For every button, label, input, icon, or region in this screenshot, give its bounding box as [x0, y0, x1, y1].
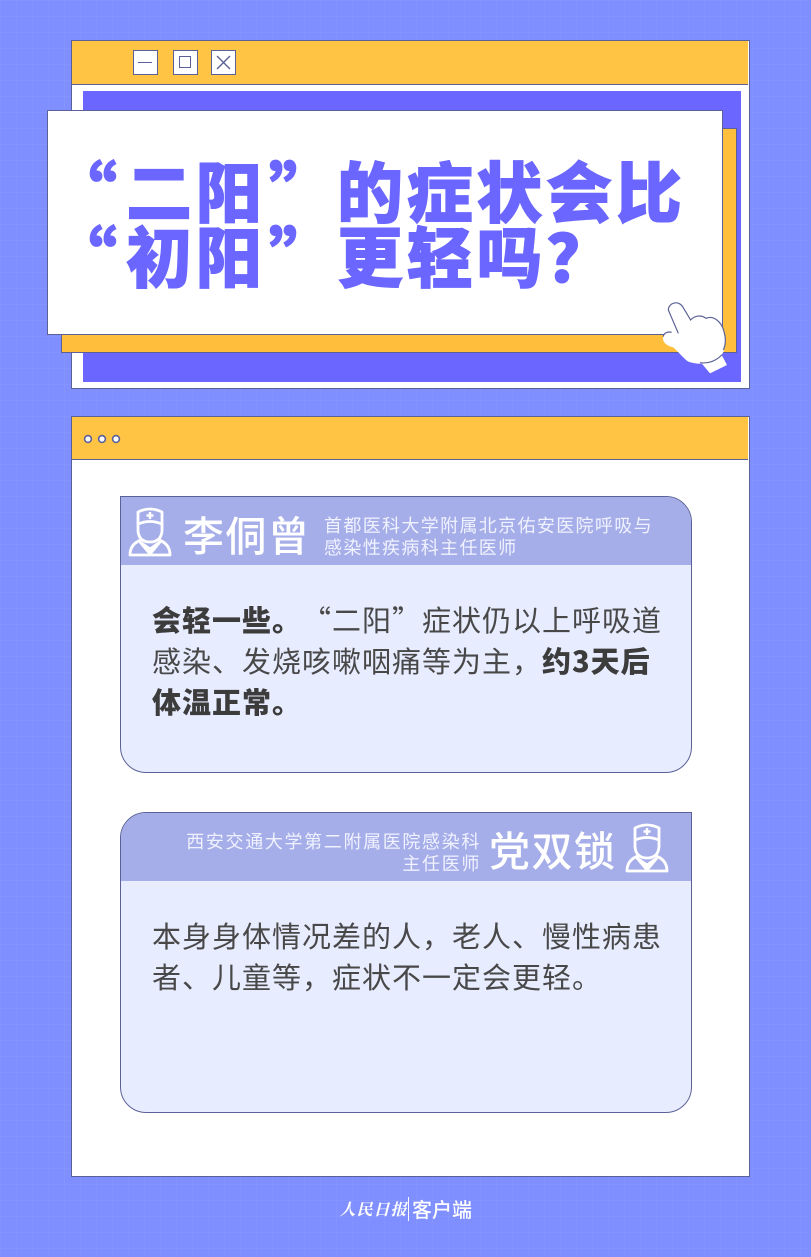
divider and app name: 客户端 — [412, 1194, 472, 1223]
affiliation: doctor 1: 首都医科大学附属北京佑安医院呼吸与 — [324, 512, 653, 538]
affiliation: doctor 1 — [324, 512, 653, 560]
newspaper name: 人民日报 — [338, 1197, 412, 1220]
affiliation: doctor 1: 感染性疾病科主任医师 — [324, 534, 518, 560]
card 1 header — [121, 497, 691, 565]
opinion text: doctor 1: 体温正常。 — [152, 680, 302, 722]
title line 1: ” — [269, 141, 339, 237]
opinion text: doctor 2 — [152, 914, 662, 997]
opinion text: doctor 2: 本身身体情况差的人，老人、慢性病患 — [152, 914, 662, 956]
opinion text: doctor 1 — [152, 598, 662, 722]
card 2 — [120, 812, 692, 1113]
title line 1: “ — [51, 141, 121, 237]
name: doctor 1: 李侗曾 — [183, 503, 310, 563]
icon: doctor — [128, 508, 172, 556]
card 1 — [120, 496, 692, 773]
title line 2: 初阳 — [126, 206, 265, 302]
affiliation: doctor 2: 主任医师 — [402, 850, 481, 876]
opinion text: doctor 1: 会轻一些。“二阳”症状仍以上呼吸道 — [152, 598, 662, 640]
window control: maximize — [173, 50, 198, 75]
purple backing panel — [83, 91, 741, 382]
opinion text: doctor 1: 感染、发烧咳嗽咽痛等为主，约3天后 — [152, 639, 651, 681]
icon: pointing hand — [662, 302, 727, 374]
icon: doctor — [626, 824, 668, 872]
window dots — [84, 434, 120, 444]
footer logo — [338, 1194, 472, 1223]
affiliation: doctor 2: 西安交通大学第二附属医院感染科 — [186, 828, 481, 854]
affiliation: doctor 2 — [186, 828, 481, 876]
title line 1: 二阳 — [126, 141, 265, 237]
title line 1: 的症状会比 — [337, 141, 686, 237]
window control: close — [211, 50, 236, 75]
title line 2: 更轻吗？ — [337, 206, 616, 302]
title panel — [47, 110, 723, 335]
title bar — [72, 41, 748, 85]
title line 2 — [51, 206, 616, 302]
top window — [71, 40, 750, 389]
title bar — [72, 417, 748, 460]
title line 2: “ — [51, 206, 121, 302]
opinion text: doctor 2: 者、儿童等，症状不一定会更轻。 — [152, 955, 602, 997]
name: doctor 2: 党双锁 — [489, 818, 616, 878]
content window — [71, 416, 750, 1177]
yellow offset panel — [61, 128, 737, 353]
title line 2: ” — [269, 206, 339, 302]
title line 1 — [51, 141, 686, 237]
window control: minimize — [133, 50, 158, 75]
card 2 header — [121, 813, 691, 881]
